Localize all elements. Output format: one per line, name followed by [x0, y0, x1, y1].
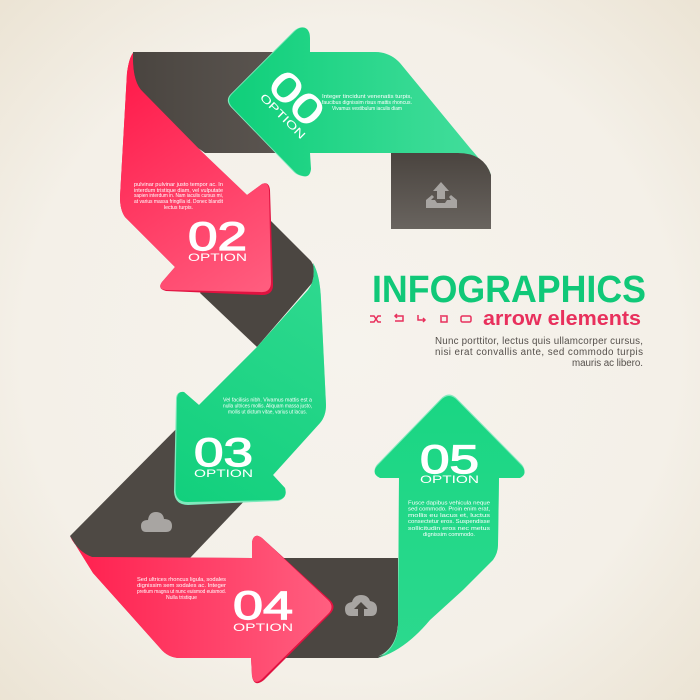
- body text: Nulla tristique: [166, 595, 197, 601]
- panel: option 05 arrow: [375, 394, 525, 658]
- icon: cloud: [141, 512, 172, 532]
- title: INFOGRAPHICS: [372, 269, 646, 311]
- description text: mauris ac libero.: [572, 358, 643, 369]
- body text: [322, 94, 412, 112]
- body text: [137, 577, 227, 601]
- label: option: OPTION: [188, 252, 247, 264]
- body text: mollis eu lacus et, luctus: [408, 513, 491, 519]
- description text: [435, 336, 643, 369]
- body text: sollicitudin eros nec metus: [408, 526, 491, 532]
- body text: pretium magna ut nunc euismod euismod.: [137, 589, 226, 595]
- body text: pulvinar pulvinar justo tempor ac. In: [134, 182, 223, 188]
- panel: option 03 arrow: [174, 263, 326, 505]
- icons: small arrows row: [370, 314, 471, 322]
- panel: option 00 arrow: [228, 27, 491, 176]
- label: option: OPTION: [194, 468, 253, 480]
- body text: Fusce dapibus vehicula neque: [408, 500, 490, 506]
- body text: [223, 398, 312, 416]
- body text: [408, 500, 491, 538]
- dark ribbon: bottom band: [240, 558, 398, 658]
- body text: nulla ultrices mollis. Aliquam massa justo,: [223, 404, 312, 410]
- number 02: 02: [188, 215, 247, 259]
- dark box with upload icon: [391, 153, 491, 229]
- body text: consectetur eros. Suspendisse: [408, 519, 490, 525]
- body text: sed commodo. Proin enim erat,: [408, 506, 490, 512]
- body text: mollis ut dictum vitae, varius ut lacus.: [228, 410, 307, 416]
- subtitle: arrow elements: [483, 308, 641, 330]
- panel: option 04 arrow: [70, 536, 334, 683]
- body text: at varius massa fringilla id. Donec blandit: [134, 199, 224, 205]
- body text: Sed ultrices rhoncus ligula, sodales: [137, 577, 227, 583]
- label: option: OPTION: [420, 474, 479, 486]
- dark ribbon: top band: [130, 52, 300, 153]
- body text: lectus turpis.: [164, 205, 193, 211]
- number 00: 00: [260, 62, 333, 135]
- body text: Vel facilisis nibh. Vivamus mattis est a: [223, 398, 312, 404]
- description text: Nunc porttitor, lectus quis ullamcorper cursus,: [435, 336, 643, 347]
- number 03: 03: [194, 431, 253, 475]
- dark ribbon: middle diagonal band: [200, 212, 315, 347]
- panel: option 02 arrow: [120, 53, 273, 295]
- icon: cloud upload: [345, 595, 377, 616]
- body text: sapien interdum in. Nam iaculis cursus mi,: [134, 193, 223, 199]
- body text: Integer tincidunt venenatis turpis,: [322, 94, 412, 100]
- icon: upload tray: [426, 182, 457, 208]
- label: option: OPTION: [257, 92, 307, 142]
- body text: [134, 182, 224, 211]
- number 05: 05: [420, 438, 479, 482]
- body text: faucibus dignissim risus mattis rhoncus.: [322, 100, 412, 106]
- body text: Vivamus vestibulum iaculis diam: [332, 106, 402, 112]
- number 04: 04: [233, 584, 293, 628]
- label: option: OPTION: [233, 622, 293, 634]
- description text: nisi erat convallis ante, sed commodo turpis: [435, 347, 643, 358]
- body text: dignissim commodo.: [423, 532, 475, 538]
- dark ribbon: lower diagonal band: [70, 405, 250, 558]
- body text: interdum tristique diam, vel vulputate: [134, 188, 223, 194]
- body text: dignissim sem sodales ac. Integer: [137, 583, 226, 589]
